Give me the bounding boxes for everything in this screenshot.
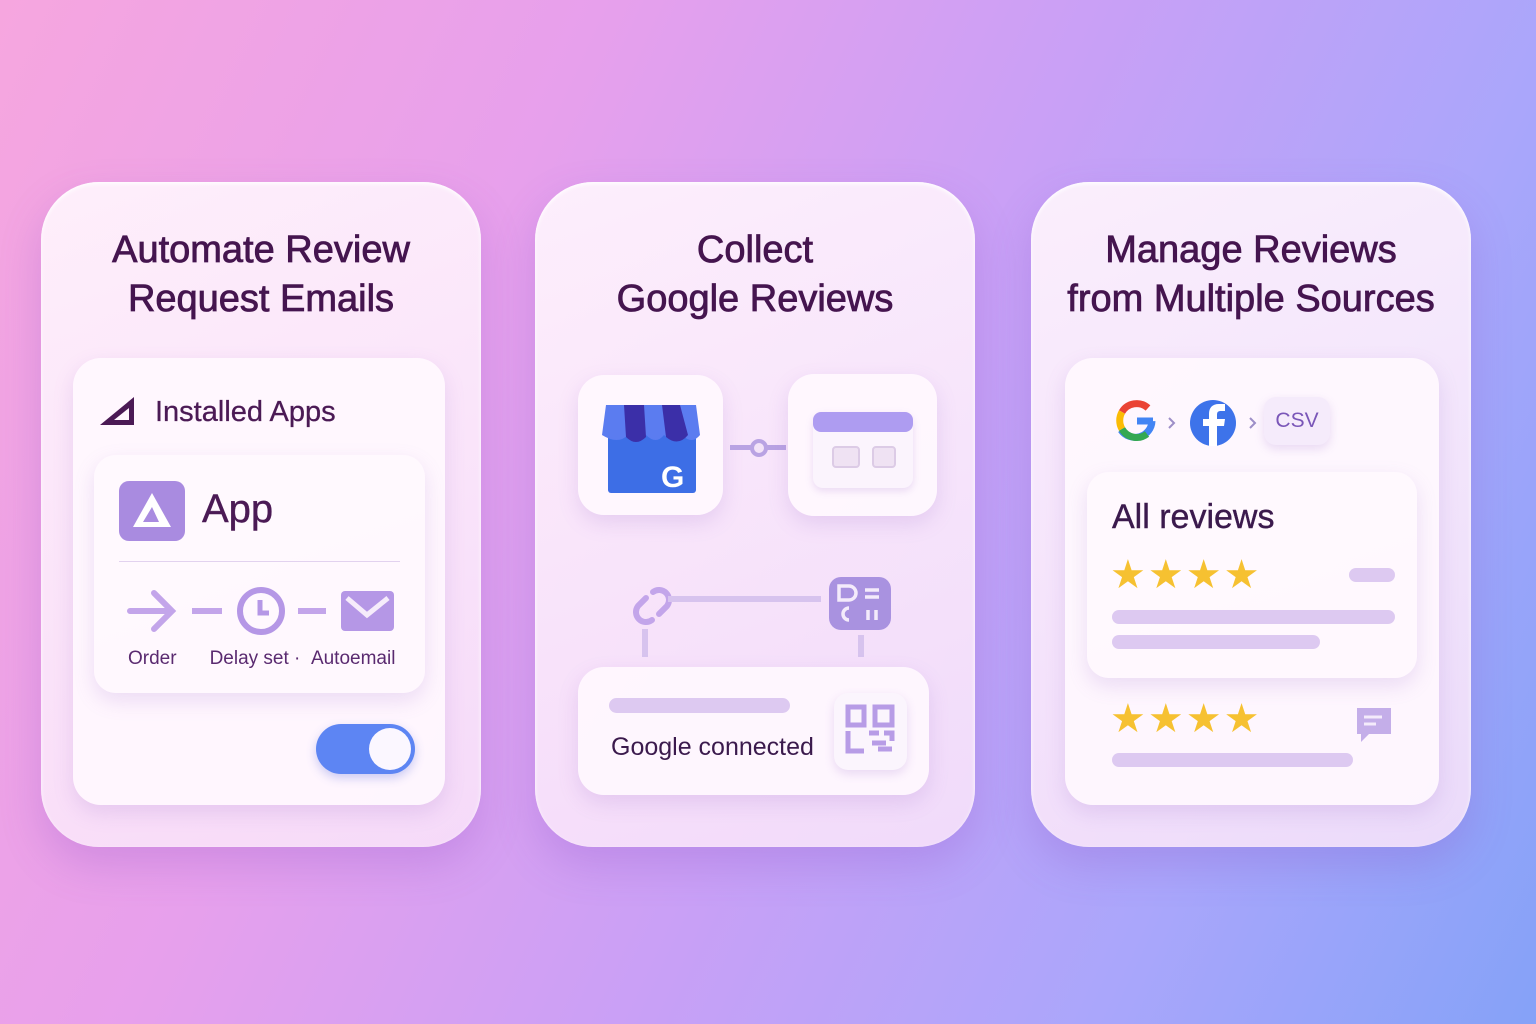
title 2: Google Reviews [617, 278, 893, 320]
title 3: from Multiple Sources [1067, 278, 1435, 320]
tile: google business store [578, 375, 723, 515]
stars row 1: ★★★★ [1110, 553, 1261, 597]
title 3 [1067, 229, 1435, 320]
card 3: manage reviews [1031, 182, 1471, 847]
title 3: Manage Reviews [1105, 229, 1397, 271]
card: google connected [578, 667, 929, 795]
stars row 2: ★★★★ [1110, 697, 1261, 741]
panel: installed apps [73, 358, 445, 805]
tile: web page [788, 374, 937, 516]
text: google connected: Google connected [611, 733, 814, 761]
title 1: Automate Review [112, 229, 410, 271]
title 2 [617, 229, 893, 320]
icon: chat [1357, 708, 1391, 742]
labels: order, delay set, autoemail: Order Delay set · Autoemail [128, 648, 395, 669]
card 1: automate review emails [41, 182, 481, 847]
card: all reviews [1087, 472, 1417, 678]
toggle [316, 724, 415, 774]
heading: all reviews: All reviews [1112, 498, 1274, 536]
icon: app [119, 481, 185, 541]
title 1: Request Emails [128, 278, 394, 320]
icon: installed apps triangle [100, 397, 134, 425]
icon: qr code [834, 693, 907, 770]
title 2: Collect [697, 229, 813, 271]
heading: installed apps: Installed Apps [155, 396, 336, 428]
source icons [1116, 400, 1256, 446]
panel: reviews [1065, 358, 1439, 805]
pill: csv [1264, 397, 1330, 445]
flow icons [127, 587, 394, 635]
link and qr connector [633, 577, 891, 657]
tile: google business store: G [661, 461, 684, 494]
card 2: collect google reviews [535, 182, 975, 847]
title 1 [112, 229, 410, 320]
sub-card: app [94, 455, 425, 693]
text: app: App [202, 487, 273, 531]
pill: csv: CSV [1275, 409, 1319, 432]
connector [730, 439, 786, 457]
